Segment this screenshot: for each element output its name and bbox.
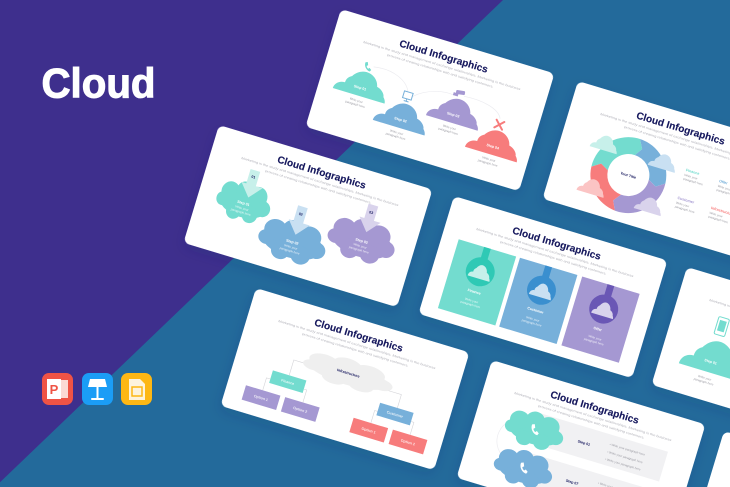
label: Customer: Write your [675, 201, 690, 208]
background: purple diagonal [0, 0, 503, 487]
cloud 1 [212, 174, 276, 229]
box: Option 2 red: Option 2 [400, 438, 415, 446]
slide: three panels [418, 196, 667, 378]
slide description [474, 227, 635, 284]
cloud 2 text [279, 237, 303, 256]
step 2 cloud [373, 96, 432, 136]
step 4 label: Step 04 [486, 143, 499, 150]
slide description [276, 319, 437, 376]
pink cloud [577, 175, 608, 198]
label: Offer [716, 179, 730, 198]
icon: PowerPoint: P [50, 382, 59, 397]
ring centre title: Your Title [620, 171, 637, 180]
label: Finance: Write your [684, 173, 698, 181]
step captions: Write your [390, 128, 404, 136]
step captions: paragraph here [438, 126, 459, 136]
step 1 bullets: • Write your paragraph here [607, 450, 644, 464]
panel: Offer: Write your [588, 334, 602, 342]
cloud 2 text: Step 02 [286, 238, 299, 246]
arrow 3 [356, 202, 385, 235]
label: Infrastructure [708, 206, 730, 225]
label: Customer [674, 196, 698, 214]
label: Finance [683, 168, 706, 187]
icon: tools [494, 120, 504, 130]
step 1 bullets: • Write your paragraph here [609, 442, 646, 457]
pale blue cloud [648, 150, 679, 173]
slide description [598, 112, 730, 169]
icon: phone white 1 [529, 423, 541, 436]
slide description: process of creating relationships with and satisfying customers. [302, 332, 409, 368]
step captions: Write your [442, 124, 457, 131]
slide description: Marketing is the study and management of exchange relationships. Marketing is the business [476, 227, 635, 278]
panel: Finance: Finance [467, 288, 481, 296]
step captions: paragraph here [345, 99, 366, 109]
slide background [418, 196, 667, 378]
slide: step list [456, 360, 705, 487]
app icons row [42, 373, 152, 405]
connector arcs [369, 66, 504, 122]
slide: org tree [220, 288, 469, 470]
step cloud [679, 332, 730, 382]
slide background [183, 125, 432, 307]
pale teal cloud [590, 132, 621, 154]
step label: Step 01 [704, 358, 717, 366]
slide title: Cloud Infographics [635, 111, 727, 148]
cloud 2 text: paragraph here [279, 246, 300, 256]
band: step 1 [530, 413, 668, 481]
step 1 label: Step 01 [353, 84, 367, 92]
step captions: Write your [349, 96, 363, 104]
step captions: paragraph here [477, 158, 498, 168]
cloud 2 [253, 211, 332, 271]
band: step 2 [518, 452, 656, 487]
slide: cloud arrows [183, 125, 432, 307]
cloud label: Infrastructure [337, 368, 360, 379]
icon: camera [453, 88, 466, 98]
slide description: Marketing is the study and management of exchange relationships. Marketing is the business [241, 156, 400, 207]
label: Customer: paragraph here [674, 204, 695, 214]
cloud 3 text [349, 236, 372, 255]
tree connectors [263, 354, 421, 435]
cloud: Infrastructure [300, 346, 397, 401]
heading: Cloud: Cloud [42, 60, 156, 106]
slide description [512, 391, 673, 448]
icon: phone white 2 [518, 462, 530, 474]
step 4 cloud [465, 123, 524, 162]
cloud 3 text: paragraph here [349, 245, 370, 255]
slide description: process of creating relationships with and satisfying customers. [387, 53, 494, 89]
box: Customer: Customer [386, 410, 404, 419]
panel: Customer [499, 258, 577, 344]
slide: cloud steps [305, 9, 554, 191]
label: Finance: Finance [685, 168, 700, 176]
timeline arc [492, 414, 521, 459]
box: Option 1 red [349, 418, 388, 443]
step caption [693, 373, 715, 387]
slide: clipped corner [688, 431, 730, 487]
slide description: process of creating relationships with and satisfying customers. [500, 240, 607, 276]
step 1 label: Step 01 [577, 439, 591, 447]
slide: phone step [651, 267, 730, 449]
step 1 cloud [501, 404, 569, 456]
slide description [239, 156, 400, 213]
step 3 cloud [426, 91, 485, 131]
step 1 bullets: • Write your paragraph here [605, 457, 641, 472]
arrow 2 [285, 204, 314, 238]
slide background [456, 360, 705, 487]
label: Infrastructure: paragraph here [708, 215, 729, 224]
step 1 cloud [333, 64, 392, 104]
slide description: process of creating relationships with and satisfying customers. [265, 169, 372, 205]
slide description: Marketing is the study and management of exchange relationships. Marketing is the business [600, 112, 730, 163]
cloud 3 text: Step 03 [355, 237, 368, 245]
slide title: Cloud Infographics [398, 39, 490, 76]
label: Customer: Customer [677, 196, 695, 205]
slide title: Cloud Infographics [549, 390, 641, 427]
slide description: process of creating relationships with and satisfying customers. [624, 125, 730, 161]
cloud 3 text: Write your [353, 242, 367, 250]
slide title: Cloud Infographics [276, 155, 368, 192]
box: Option 1 purple [242, 385, 280, 410]
slide description: process of creating relationships with and satisfying customers. [538, 404, 645, 440]
ring chart [590, 137, 666, 213]
step captions: paragraph here [385, 131, 406, 141]
icon: Keynote [82, 373, 113, 405]
box: Option 1 purple: Option 1 [253, 394, 268, 402]
slide background [220, 288, 469, 470]
box: Customer [376, 403, 414, 425]
slide title: Cloud Infographics [511, 226, 603, 263]
step 2 cloud [490, 442, 557, 487]
label: Finance: paragraph here [683, 177, 704, 187]
step 2 label: Step 07 [565, 479, 579, 486]
cloud 3 [323, 210, 401, 270]
icon: monitor [402, 91, 413, 103]
icon: smartphone [714, 316, 730, 337]
box: Option 2 red [389, 430, 427, 454]
pale purple cloud [634, 194, 665, 216]
step captions [339, 94, 505, 169]
box: Option 2 purple: Option 2 [293, 406, 308, 414]
arrow 1 number: 01 [251, 175, 256, 180]
step caption: paragraph here [693, 377, 714, 387]
step caption: Write your [698, 374, 712, 382]
icon: Google Slides [121, 373, 152, 405]
panel: Customer: Write your [526, 315, 540, 323]
icon: phone [363, 61, 373, 72]
step 2 label: Step 02 [394, 116, 407, 124]
cloud 1 text [230, 199, 254, 217]
cloud 2 text: Write your [284, 243, 298, 251]
step 1 bullets [605, 442, 646, 472]
panel: Offer: paragraph here [583, 337, 605, 347]
slide title: Cloud Infographics [313, 318, 405, 355]
cloud 1 text: Write your [235, 204, 249, 212]
panel: Finance: Write your [464, 297, 479, 304]
box: Option 1 red: Option 1 [361, 427, 376, 435]
slide description: Marketing is the study and management of exchange relationships. Marketing is the business [514, 391, 673, 442]
slide description: Marketing is the study and management of exchange relationships. Marketing is the business [278, 319, 437, 370]
slide background [542, 81, 730, 263]
arrow 1 [238, 168, 267, 201]
label: Infrastructure: Write your [709, 211, 723, 218]
slide background [305, 9, 554, 191]
panel: Finance [438, 239, 516, 325]
slide background [651, 267, 730, 449]
slide description [361, 40, 522, 97]
panel: Customer: paragraph here [521, 318, 542, 328]
slide: cycle ring [542, 81, 730, 263]
slide description: Marketing is the study and management of exchange relationships. Marketing is the business [363, 40, 522, 91]
arrow 3 number: 03 [369, 210, 374, 215]
step 3 label: Step 03 [446, 111, 460, 119]
step captions: Write your [482, 155, 496, 163]
box: Finance: Finance [281, 378, 295, 386]
panel: Offer: Offer [593, 326, 603, 333]
arrow 2 number: 02 [298, 212, 303, 217]
panel: Finance: paragraph here [460, 299, 481, 309]
box: Finance [269, 370, 306, 393]
label: Offer: Offer [719, 179, 729, 186]
panel: Customer: Customer [527, 306, 545, 315]
box: Option 2 purple [281, 397, 320, 422]
cloud 1 text: paragraph here [230, 207, 251, 217]
cloud 1 text: Step 01 [237, 200, 250, 207]
panel: Offer [561, 276, 640, 363]
